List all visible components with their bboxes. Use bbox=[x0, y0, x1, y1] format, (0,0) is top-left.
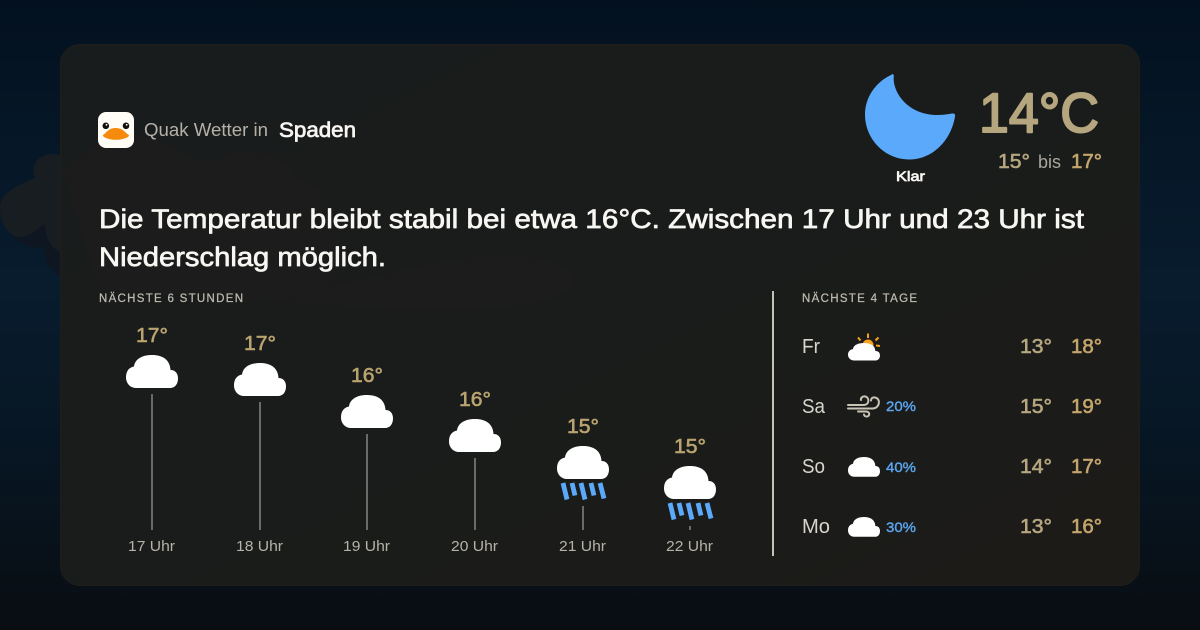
day: Sunday: 40% bbox=[886, 459, 916, 475]
header: app name and location bbox=[98, 112, 356, 148]
hour: 18 Uhr bbox=[234, 333, 286, 555]
panel: next 6 hours bbox=[99, 293, 716, 555]
hour: 20 Uhr bbox=[449, 389, 501, 555]
text: current temperature: 14°C bbox=[979, 81, 1099, 144]
day: Friday: 13° bbox=[1020, 336, 1052, 358]
text: condition: Klar bbox=[896, 168, 925, 184]
panel: weather card bbox=[60, 44, 1140, 586]
day: Friday bbox=[802, 334, 1102, 360]
hour: 22 Uhr: 22 Uhr bbox=[666, 539, 713, 555]
icon: duck logo bbox=[98, 112, 134, 148]
hour: 19 Uhr: 16° bbox=[351, 365, 383, 387]
day: Friday: 18° bbox=[1071, 336, 1102, 358]
divider bbox=[772, 291, 774, 556]
day: Monday: 13° bbox=[1020, 516, 1052, 538]
headline: Die Temperatur bleibt stabil bei etwa 16°C. Zwischen 17 Uhr und 23 Uhr ist bbox=[99, 204, 1085, 234]
day: Saturday bbox=[802, 396, 1102, 418]
day: Sunday: 17° bbox=[1071, 456, 1102, 478]
hour: 21 Uhr: 21 Uhr bbox=[559, 539, 606, 555]
headline: Niederschlag möglich. bbox=[99, 242, 386, 272]
text: temperature range bbox=[998, 151, 1102, 173]
icon: wind bbox=[848, 396, 879, 416]
day: Sunday: So bbox=[802, 456, 825, 478]
hour: 19 Uhr bbox=[341, 365, 393, 555]
icon: cloud bbox=[848, 457, 880, 477]
hour: 17 Uhr bbox=[126, 325, 178, 555]
day: Saturday: Sa bbox=[802, 396, 826, 418]
day: Monday: 16° bbox=[1071, 516, 1102, 538]
hour: 19 Uhr: 19 Uhr bbox=[343, 539, 390, 555]
background cloud bbox=[0, 154, 62, 278]
icon: cloud bbox=[848, 517, 880, 537]
text: app name: Quak Wetter in bbox=[144, 120, 268, 140]
hour: 20 Uhr: 16° bbox=[459, 389, 491, 411]
text: temperature range: 15° bbox=[998, 151, 1030, 173]
icon: moon bbox=[865, 74, 955, 160]
icon: sun behind cloud bbox=[848, 334, 880, 360]
heading: next 6 hours: NÄCHSTE 6 STUNDEN bbox=[99, 293, 243, 305]
hour: 18 Uhr: 18 Uhr bbox=[236, 539, 283, 555]
text: temperature range: bis bbox=[1038, 152, 1061, 172]
day: Saturday: 20% bbox=[886, 398, 916, 414]
day: Saturday: 19° bbox=[1071, 396, 1102, 418]
day: Monday: Mo bbox=[802, 516, 830, 538]
hour: 21 Uhr: 15° bbox=[567, 416, 599, 438]
panel: next 4 days bbox=[802, 293, 1102, 538]
day: Sunday bbox=[802, 456, 1102, 478]
text: location: Spaden bbox=[279, 119, 356, 142]
hour: 21 Uhr bbox=[557, 416, 609, 555]
current weather bbox=[865, 74, 1102, 184]
hour: 22 Uhr: 15° bbox=[674, 436, 706, 458]
hour: 18 Uhr: 17° bbox=[244, 333, 276, 355]
day: Monday bbox=[802, 516, 1102, 538]
hour: 17 Uhr: 17 Uhr bbox=[128, 539, 175, 555]
hour: 17 Uhr: 17° bbox=[136, 325, 168, 347]
heading: next 4 days: NÄCHSTE 4 TAGE bbox=[802, 293, 917, 305]
day: Saturday: 15° bbox=[1020, 396, 1052, 418]
text: temperature range: 17° bbox=[1071, 151, 1102, 173]
hour: 20 Uhr: 20 Uhr bbox=[451, 539, 498, 555]
day: Monday: 30% bbox=[886, 519, 916, 535]
day: Sunday: 14° bbox=[1020, 456, 1052, 478]
headline bbox=[99, 204, 1085, 272]
hour: 22 Uhr bbox=[664, 436, 716, 555]
day: Friday: Fr bbox=[802, 336, 820, 358]
